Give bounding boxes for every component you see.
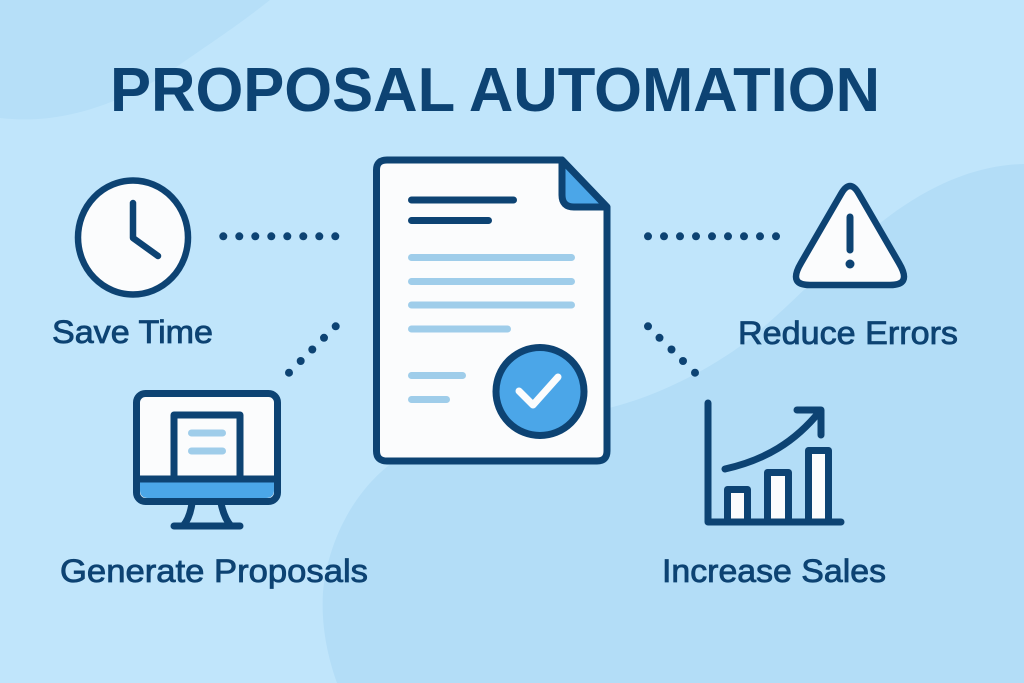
folded corner: [562, 160, 607, 207]
icon: clock: [78, 180, 188, 294]
axes: [708, 403, 841, 522]
check badge: [496, 348, 584, 436]
monitor screen: [136, 394, 278, 502]
blue taskbar: [140, 482, 274, 498]
dotted connector: generate proposals: [285, 322, 340, 377]
icon: warning triangle: [796, 186, 904, 285]
heading lines: [412, 200, 514, 220]
label: increase sales: Increase Sales: [662, 553, 886, 589]
bars: [728, 450, 828, 522]
label: reduce errors: Reduce Errors: [738, 315, 958, 351]
document on screen: [174, 415, 240, 479]
icon: monitor: [136, 394, 278, 526]
dotted connector: increase sales: [644, 322, 699, 377]
dotted connector: save time: [219, 232, 339, 240]
trend arrow: [725, 410, 821, 469]
document page: [376, 160, 607, 461]
label: generate proposals: Generate Proposals: [60, 553, 368, 589]
title: PROPOSAL AUTOMATION: [110, 56, 880, 125]
monitor stand: [174, 503, 240, 526]
central document icon: [376, 160, 607, 461]
label: save time: Save Time: [52, 314, 213, 350]
dotted connector: reduce errors: [644, 232, 780, 240]
body text lines: [412, 258, 572, 400]
icon: growth chart: [708, 403, 841, 522]
